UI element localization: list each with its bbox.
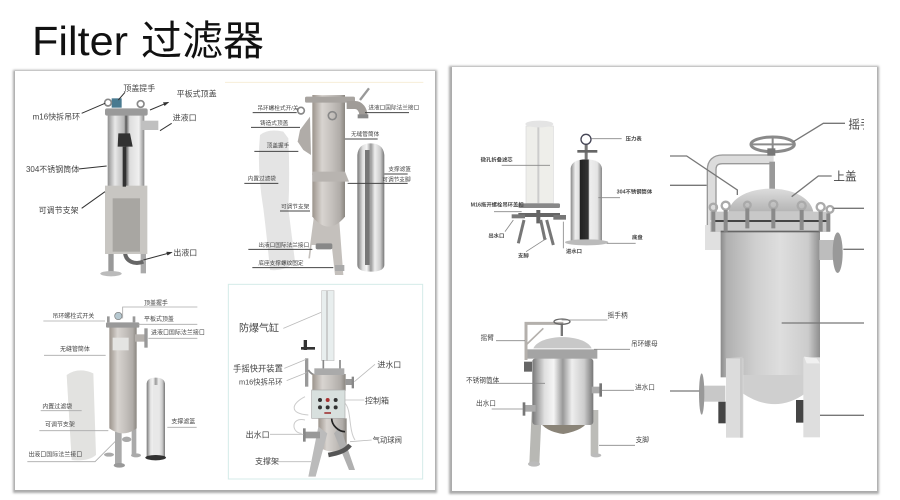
leader lines bbox=[670, 123, 864, 415]
labels: 支撑架 bbox=[255, 456, 279, 466]
vessel bbox=[100, 98, 158, 276]
labels: 吊环螺栓式开关 bbox=[52, 312, 94, 320]
cylinder and vessel bbox=[294, 291, 355, 477]
labels: M16拖开螺栓吊环盖扣 bbox=[471, 200, 524, 208]
labels: 支脚 bbox=[636, 435, 649, 444]
labels: 摇臂 bbox=[481, 333, 494, 342]
labels: 吊环螺栓式开/关 bbox=[257, 104, 299, 112]
labels: 支撑滤篮 bbox=[171, 418, 195, 426]
labels: 出水口 bbox=[488, 231, 504, 239]
panel: right image sheet bbox=[449, 66, 884, 494]
diagram: tall bag filter on three legs bbox=[27, 299, 205, 468]
control box bbox=[312, 390, 345, 418]
diagram: cartridge filter bbox=[471, 121, 653, 259]
housing bbox=[565, 134, 608, 245]
labels: 可调节支架 bbox=[45, 421, 75, 429]
callouts and labels: m16快拆吊环 bbox=[33, 112, 80, 122]
filter bag bbox=[67, 370, 96, 460]
callouts and labels: 顶盖提手 bbox=[123, 83, 155, 93]
support basket bbox=[357, 143, 384, 272]
labels: 出液口国际法兰接口 bbox=[28, 450, 82, 458]
labels bbox=[27, 299, 205, 462]
labels: 顶盖握手 bbox=[267, 142, 290, 150]
cartridge assembly bbox=[512, 121, 566, 245]
labels: 压力表 bbox=[626, 134, 642, 142]
labels: 出水口 bbox=[246, 430, 270, 440]
legs bbox=[726, 358, 743, 438]
labels: 进水口 bbox=[635, 382, 655, 391]
title: 过滤器 bbox=[141, 18, 264, 64]
labels: 微孔折叠滤芯 bbox=[481, 155, 513, 163]
ring bolts bbox=[710, 201, 833, 232]
filter bag bbox=[259, 131, 295, 270]
labels: 防爆气缸 bbox=[239, 322, 279, 335]
labels: m16快拆吊环 bbox=[239, 378, 283, 387]
labels: 手摇快开装置 bbox=[233, 363, 283, 373]
labels: 顶盖握手 bbox=[144, 299, 168, 307]
labels: 无缝管筒体 bbox=[60, 345, 90, 353]
labels: 底座支撑螺纹固定 bbox=[258, 259, 304, 267]
labels: 不锈钢筒体 bbox=[466, 375, 500, 384]
labels: 进液口国际法兰接口 bbox=[151, 329, 205, 337]
diagram: large multi-bag filter bbox=[466, 310, 658, 467]
callouts and labels: 出液口 bbox=[173, 248, 197, 258]
handwheel bbox=[751, 137, 794, 156]
labels: 内置过滤袋 bbox=[42, 402, 72, 410]
labels: 304不锈钢筒体 bbox=[617, 188, 653, 196]
labels: 支撑滤篮 bbox=[388, 165, 411, 173]
labels: 进水口 bbox=[377, 359, 401, 369]
labels bbox=[466, 310, 658, 445]
labels bbox=[244, 104, 419, 268]
vessel bbox=[699, 137, 843, 438]
labels: 可调节支架 bbox=[281, 202, 310, 210]
vessel bbox=[298, 88, 369, 275]
support basket bbox=[145, 378, 166, 460]
labels: 底盘 bbox=[632, 233, 643, 241]
vessel bbox=[104, 312, 148, 468]
labels: 无缝管筒体 bbox=[351, 130, 380, 138]
label: top cover: 上盖 bbox=[833, 170, 857, 184]
callouts and labels: 可调节支架 bbox=[39, 205, 79, 215]
labels: 控制箱 bbox=[365, 395, 389, 405]
diagram: pneumatic filter with control box bbox=[228, 284, 423, 479]
labels: 可调节支脚 bbox=[382, 176, 411, 184]
callouts and labels: 304不锈钢筒体 bbox=[26, 164, 79, 174]
labels: 铸造式顶盖 bbox=[260, 119, 289, 127]
diagram: bag filter with bag and basket bbox=[225, 82, 423, 275]
labels: 进液口国际法兰接口 bbox=[368, 104, 419, 112]
vessel bbox=[523, 319, 602, 467]
labels bbox=[233, 312, 402, 466]
labels: 内置过滤袋 bbox=[248, 174, 276, 182]
labels: 支脚 bbox=[518, 251, 529, 259]
labels: 吊环螺母 bbox=[631, 339, 658, 348]
labels: 摇手柄 bbox=[608, 310, 628, 319]
label: handwheel (cropped at image edge): 摇手柄 bbox=[848, 118, 884, 132]
labels: 平板式顶盖 bbox=[144, 315, 174, 323]
labels: 出水口 bbox=[476, 399, 496, 408]
callouts and labels: 平板式顶盖 bbox=[177, 89, 217, 99]
inlet and outlet flanges bbox=[819, 240, 835, 260]
diagram: large vessel with handwheel bbox=[670, 118, 884, 438]
labels: 出液口国际法兰接口 bbox=[258, 241, 309, 249]
panel: left image sheet bbox=[13, 70, 437, 493]
labels: 进水口 bbox=[566, 247, 582, 255]
title: Filter bbox=[32, 18, 128, 64]
labels bbox=[471, 134, 653, 259]
diagram: bag filter with adjustable frame bbox=[26, 83, 217, 276]
labels: 气动球阀 bbox=[373, 435, 402, 444]
callouts and labels: 进液口 bbox=[173, 113, 197, 123]
callouts and labels bbox=[26, 83, 217, 260]
